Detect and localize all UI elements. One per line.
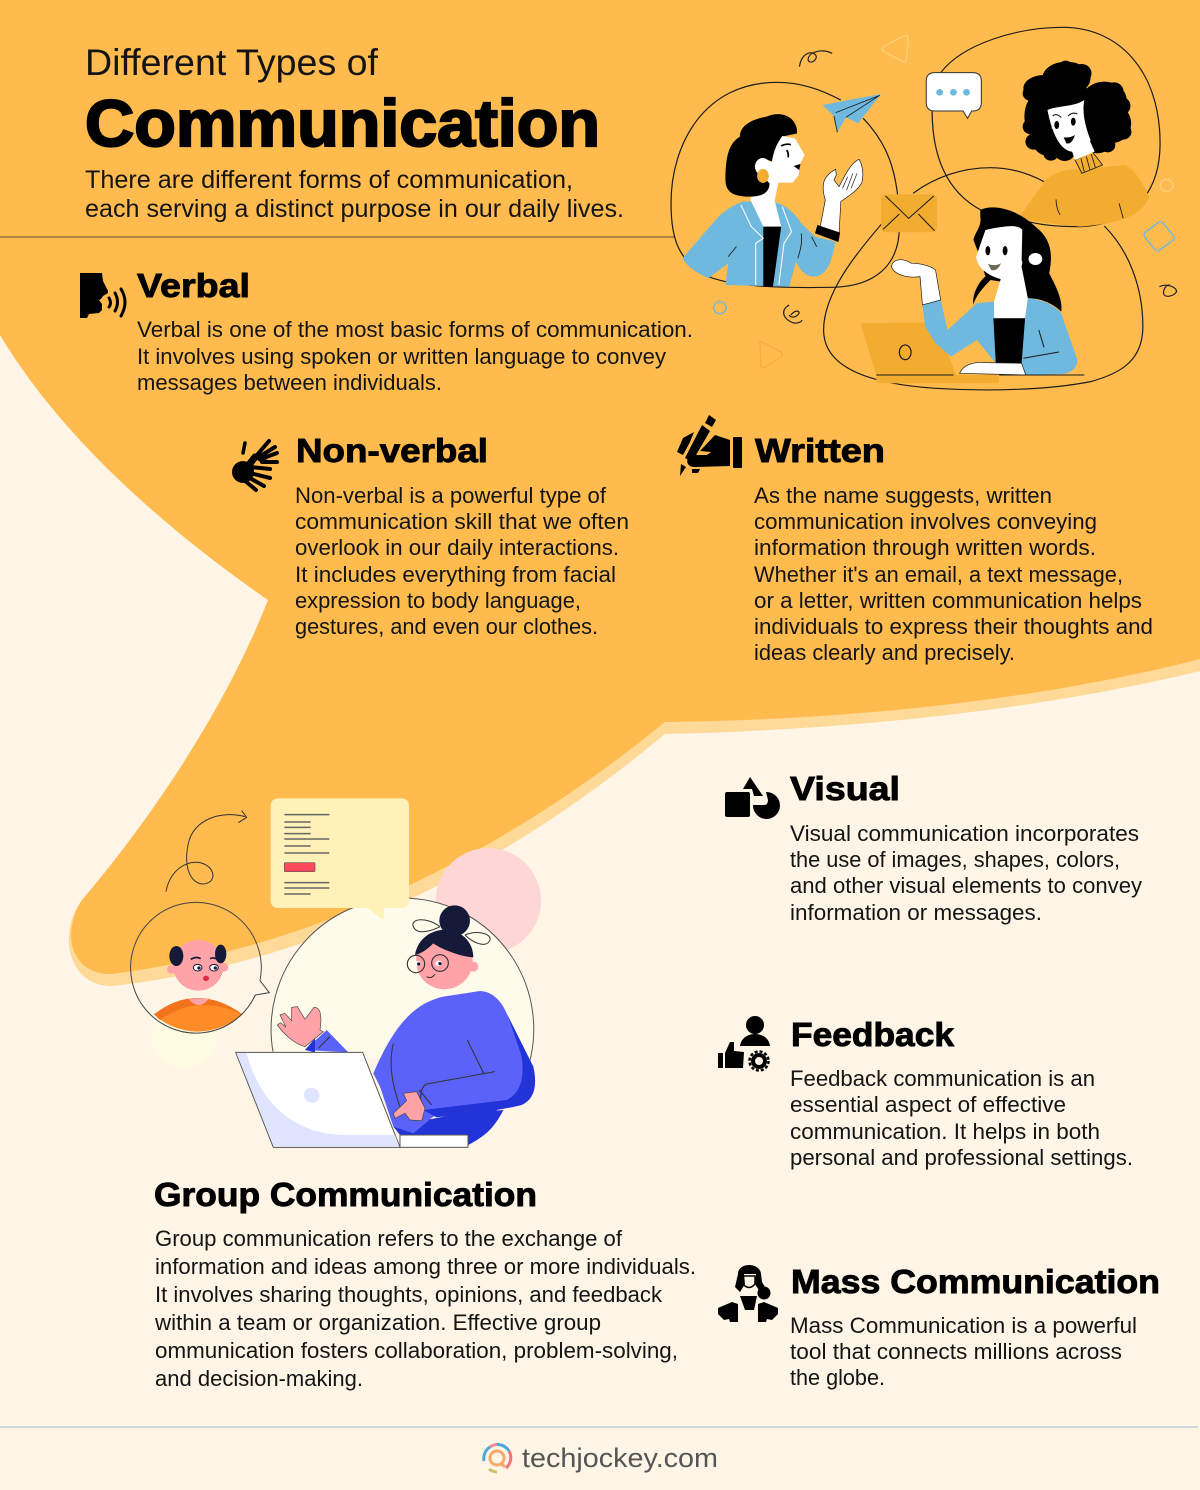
heading: Group Communication: Group Communication (154, 1176, 537, 1213)
text: Group Communication description: ommunication fosters collaboration, problem-solving, (155, 1338, 678, 1363)
heading: Non-verbal: Non-verbal (296, 432, 488, 469)
text: Visual description: and other visual elements to convey (790, 873, 1142, 898)
envelope (881, 194, 937, 232)
woman with glasses at laptop (277, 905, 535, 1145)
text: Visual description (790, 821, 1142, 925)
text: Feedback description: Feedback communication is an (790, 1066, 1095, 1091)
text: Written description (754, 483, 1153, 665)
text: Mass Communication description: the globe. (790, 1365, 885, 1390)
text: Written description: ideas clearly and precisely. (754, 640, 1015, 665)
text: Written description: Whether it's an email, a text message, (754, 562, 1123, 587)
text: Group Communication description: information and ideas among three or more individuals. (155, 1254, 696, 1279)
pale yellow decorative circle (152, 1004, 216, 1069)
text: Non-verbal description: Non-verbal is a powerful type of (295, 483, 607, 508)
text: Non-verbal description: It includes everything from facial (295, 562, 616, 587)
intro text (85, 166, 624, 223)
intro text: There are different forms of communication, (85, 166, 573, 194)
intro text: each serving a distinct purpose in our daily lives. (85, 195, 624, 223)
woman bottom with laptop (860, 207, 1084, 383)
text: Written description: or a letter, written communication helps (754, 588, 1142, 613)
title (85, 42, 600, 160)
decorative confetti (714, 36, 1177, 368)
illustration: group video call (131, 798, 541, 1147)
note speech card (271, 798, 409, 920)
bubble outlines (671, 27, 1160, 390)
curved arrow (166, 811, 247, 892)
text: Mass Communication description (790, 1313, 1137, 1390)
text: Group Communication description: Group communication refers to the exchange of (155, 1226, 623, 1251)
paper plane (823, 94, 881, 132)
heading: Verbal: Verbal (137, 267, 250, 304)
text: Feedback description: personal and professional settings. (790, 1145, 1133, 1170)
title: Communication (85, 86, 600, 160)
icon: hand writing with pen (677, 415, 742, 476)
background: orange speech blob shadow (0, 300, 1200, 986)
text: Visual description: the use of images, shapes, colors, (790, 847, 1120, 872)
text: Verbal description: It involves using spoken or written language to convey (137, 344, 666, 369)
heading: Mass Communication: Mass Communication (791, 1263, 1160, 1300)
pink decorative circle (436, 848, 541, 953)
man avatar in circle (131, 902, 269, 1033)
text: Written description: information through written words. (754, 535, 1096, 560)
text: Written description: individuals to express their thoughts and (754, 614, 1153, 639)
text: Non-verbal description (295, 483, 629, 639)
text: Feedback description (790, 1066, 1133, 1170)
text: Visual description: Visual communication incorporates (790, 821, 1139, 846)
text: Written description: As the name suggests, written (754, 483, 1052, 508)
icon: person with microphones (718, 1265, 778, 1322)
text: Mass Communication description: tool that connects millions across (790, 1339, 1122, 1364)
text: Verbal description (137, 317, 693, 395)
text: Non-verbal description: gestures, and even our clothes. (295, 614, 598, 639)
text: Non-verbal description: communication skill that we often (295, 509, 629, 534)
header divider (0, 236, 674, 238)
background: orange speech blob (0, 0, 1200, 974)
footer divider (0, 1426, 1198, 1428)
heading: Feedback: Feedback (791, 1016, 955, 1053)
laptop (236, 1052, 468, 1147)
icon: shapes (725, 777, 780, 819)
text: Mass Communication description: Mass Communication is a powerful (790, 1313, 1137, 1338)
chat bubble with dots (926, 73, 981, 118)
woman top right with curly hair (1018, 61, 1149, 227)
footer logo (484, 1444, 511, 1472)
icon: signing hands (232, 441, 277, 490)
text: Group Communication description: It involves sharing thoughts, opinions, and feedback (155, 1282, 663, 1307)
text: Written description: communication involves conveying (754, 509, 1097, 534)
heading: Written: Written (755, 432, 885, 469)
text: Verbal description: messages between individuals. (137, 370, 442, 395)
large circle behind woman (271, 898, 534, 1067)
text: Non-verbal description: overlook in our daily interactions. (295, 535, 619, 560)
text: Verbal description: Verbal is one of the most basic forms of communication. (137, 317, 693, 342)
footer website name: techjockey.com (522, 1443, 718, 1473)
woman left in blue jacket (682, 114, 863, 287)
icon: person, thumbs up and gear (718, 1016, 770, 1070)
text: Group Communication description: within a team or organization. Effective group (154, 1310, 601, 1335)
heading: Visual: Visual (790, 770, 900, 807)
text: Feedback description: communication. It helps in both (790, 1119, 1100, 1144)
text: Group Communication description (154, 1226, 696, 1391)
text: Group Communication description: and decision-making. (155, 1366, 363, 1391)
title: Different Types of (85, 42, 379, 83)
text: Feedback description: essential aspect of effective (790, 1092, 1066, 1117)
icon: speaking head (80, 273, 125, 318)
text: Visual description: information or messages. (790, 900, 1042, 925)
text: Non-verbal description: expression to body language, (295, 588, 581, 613)
illustration: three women in conversation bubbles (671, 27, 1177, 390)
